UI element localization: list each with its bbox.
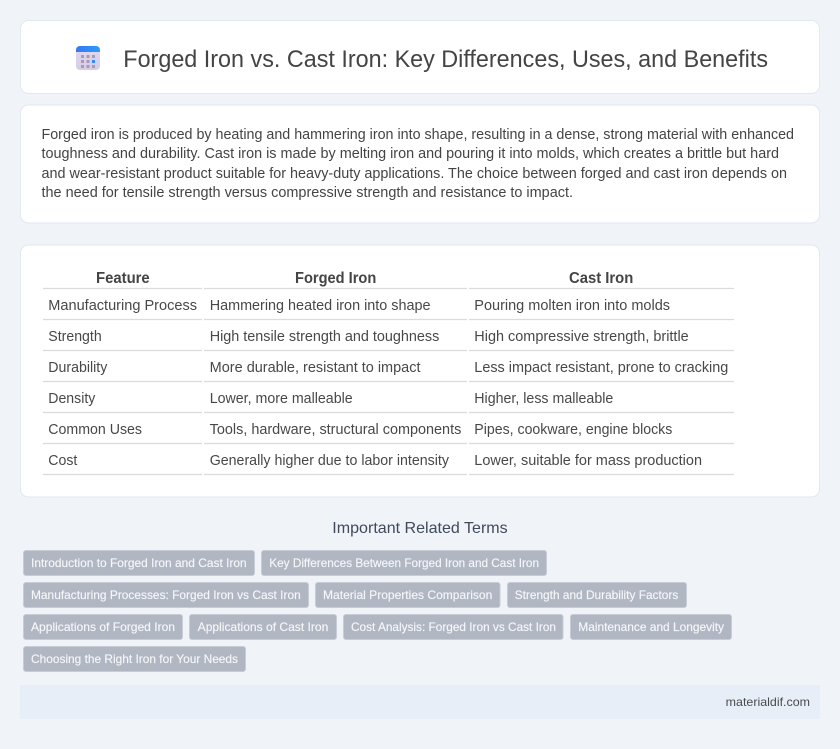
footer xyxy=(20,685,820,719)
row: manufacturing process xyxy=(48,298,670,314)
intro paragraph: toughness and durability. Cast iron is made by melting iron and pouring it into molds, which creates a brittle but hard xyxy=(42,146,779,162)
row: strength: Strength xyxy=(48,329,102,345)
related terms heading: Important Related Terms xyxy=(332,520,508,537)
tag: Introduction to Forged Iron and Cast Iron xyxy=(31,556,247,570)
row: cost: Lower, suitable for mass production xyxy=(474,453,702,469)
row: density xyxy=(48,391,613,407)
row: strength xyxy=(48,329,689,345)
row: density: Density xyxy=(48,391,96,407)
row: density: Lower, more malleable xyxy=(210,391,353,407)
header panel xyxy=(20,20,820,94)
row: common uses: Pipes, cookware, engine blocks xyxy=(474,422,672,438)
row: common uses xyxy=(48,422,672,438)
row: strength: High compressive strength, brittle xyxy=(474,329,689,345)
tag xyxy=(24,614,182,640)
row: durability: Durability xyxy=(48,360,108,376)
tag xyxy=(508,582,686,608)
tag xyxy=(24,550,254,576)
title: Forged Iron vs. Cast Iron: Key Differences, Uses, and Benefits xyxy=(123,46,768,73)
row: cost: Generally higher due to labor intensity xyxy=(210,453,450,469)
row: durability: Less impact resistant, prone to cracking xyxy=(474,360,728,376)
tag xyxy=(344,614,563,640)
tag: Maintenance and Longevity xyxy=(578,620,724,634)
table header row xyxy=(96,270,633,287)
table header row: Feature xyxy=(96,270,150,287)
tag: Manufacturing Processes: Forged Iron vs Cast Iron xyxy=(31,588,301,602)
tag: Cost Analysis: Forged Iron vs Cast Iron xyxy=(351,620,556,634)
tag xyxy=(24,582,308,608)
row: manufacturing process: Pouring molten iron into molds xyxy=(474,298,670,314)
tag: Applications of Forged Iron xyxy=(31,620,175,634)
icon: calendar xyxy=(76,46,100,70)
tag: Material Properties Comparison xyxy=(323,588,492,602)
row: strength: High tensile strength and toughness xyxy=(210,329,439,345)
panel: comparison table xyxy=(20,245,820,497)
table header row: Forged Iron xyxy=(295,270,376,287)
intro paragraph: the need for tensile strength versus compressive strength and resistance to impact. xyxy=(42,185,573,201)
row: cost xyxy=(48,453,702,469)
row: durability xyxy=(48,360,728,376)
tag: Strength and Durability Factors xyxy=(515,588,678,602)
tag xyxy=(316,582,500,608)
tag: Choosing the Right Iron for Your Needs xyxy=(31,652,238,666)
footer site name: materialdif.com xyxy=(726,695,810,709)
tag xyxy=(262,550,546,576)
table header row: Cast Iron xyxy=(569,270,633,287)
row: manufacturing process: Manufacturing Process xyxy=(48,298,197,314)
panel: introduction xyxy=(20,105,820,223)
row: durability: More durable, resistant to impact xyxy=(210,360,420,376)
row: common uses: Common Uses xyxy=(48,422,142,438)
tag xyxy=(190,614,336,640)
tag: Key Differences Between Forged Iron and Cast Iron xyxy=(269,556,539,570)
row: manufacturing process: Hammering heated iron into shape xyxy=(210,298,430,314)
row: cost: Cost xyxy=(48,453,77,469)
row: common uses: Tools, hardware, structural components xyxy=(210,422,461,438)
intro paragraph: Forged iron is produced by heating and hammering iron into shape, resulting in a dense, strong material with enhanced xyxy=(42,127,794,143)
intro paragraph: and wear-resistant product suitable for heavy-duty applications. The choice between forged and cast iron depends on xyxy=(42,166,787,182)
related terms tags xyxy=(24,550,732,672)
tag: Applications of Cast Iron xyxy=(198,620,328,634)
tag xyxy=(24,646,246,672)
intro paragraph xyxy=(42,127,794,201)
tag xyxy=(570,614,732,640)
row: density: Higher, less malleable xyxy=(474,391,613,407)
